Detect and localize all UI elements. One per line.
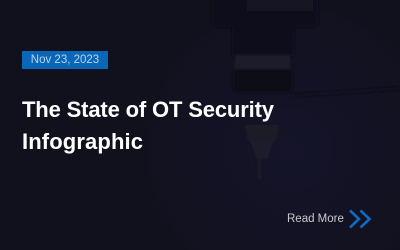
title: Infographic [22,129,143,154]
title: The State of OT Security [22,97,275,122]
date badge [22,51,108,69]
date badge: Nov 23, 2023 [31,54,99,66]
read more link: Read More [287,213,344,225]
icon: double chevron arrow [349,210,372,228]
